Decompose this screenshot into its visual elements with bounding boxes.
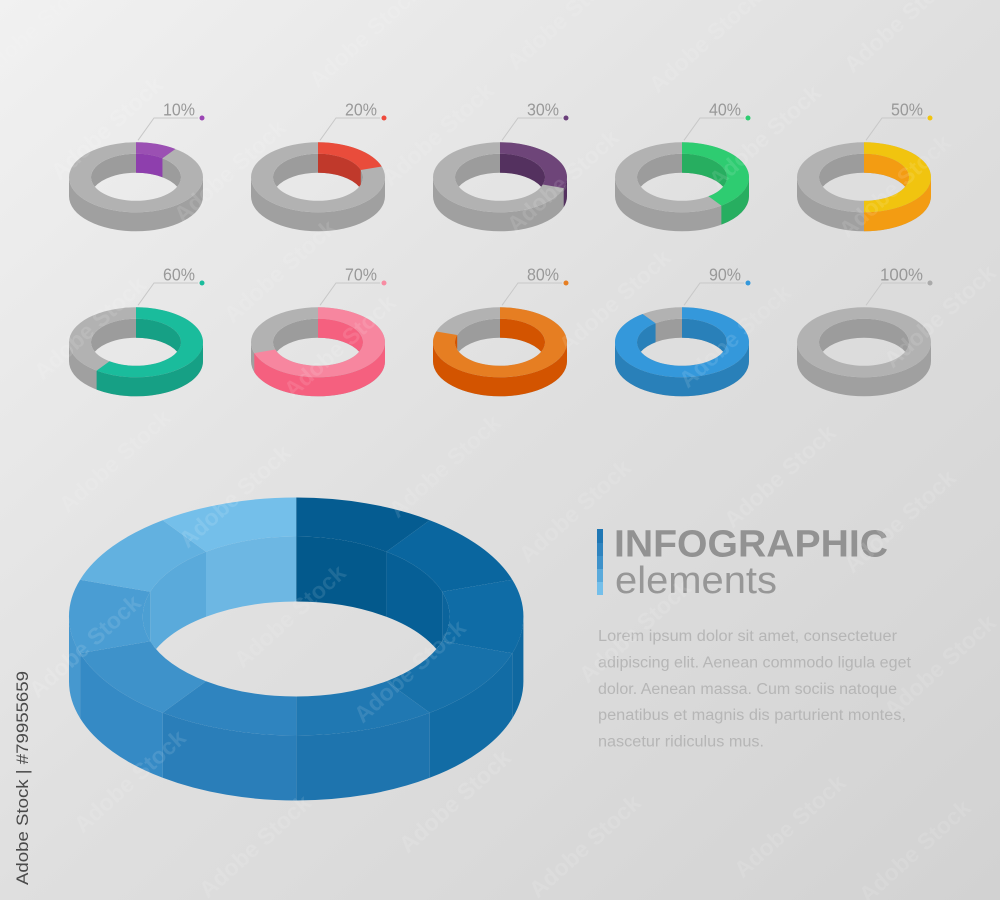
watermark pattern: Adobe Stock [554,244,676,358]
watermark pattern: Adobe Stock [384,409,506,523]
donut chart: 50% [797,99,932,231]
watermark pattern: Adobe Stock [674,279,796,393]
watermark pattern: Adobe Stock [219,214,341,328]
donut chart: 20%: 20% [345,99,377,119]
watermark pattern: Adobe Stock [69,724,191,838]
watermark pattern: Adobe Stock [54,404,176,518]
watermark pattern: Adobe Stock [879,259,1000,373]
donut chart: 60%: 60% [163,264,195,284]
watermark pattern: Adobe Stock [169,114,291,228]
donut chart: 90%: 90% [709,264,741,284]
stock credit: Adobe Stock | #79955659 [13,671,32,885]
watermark pattern: Adobe Stock [834,129,956,243]
watermark pattern: Adobe Stock [349,614,471,728]
watermark pattern: Adobe Stock [514,454,636,568]
body text: penatibus et magnis dis parturient montes, [598,707,906,724]
watermark pattern: Adobe Stock [704,79,826,193]
donut chart: 30% [433,99,568,231]
watermark pattern: Adobe Stock [574,574,696,688]
donut chart: 60% [69,264,204,396]
heading: INFOGRAPHIC: INFOGRAPHIC [614,524,888,566]
donut chart: 40%: 40% [709,99,741,119]
body text: nascetur ridiculus mus. [598,734,764,751]
watermark pattern: Adobe Stock [229,559,351,673]
watermark pattern: Adobe Stock [174,439,296,553]
body text [598,628,912,751]
donut chart: 80%: 80% [527,264,559,284]
large 3D donut chart [69,498,523,800]
watermark pattern: Adobe Stock [839,464,961,578]
watermark pattern: Adobe Stock [879,609,1000,723]
donut chart: 10% [69,99,204,231]
donut chart: 20% [251,99,386,231]
donut chart: 40% [615,99,750,231]
watermark pattern: Adobe Stock [46,71,168,185]
donut chart: 70%: 70% [345,264,377,284]
watermark pattern: Adobe Stock [719,419,841,533]
donut chart: 90% [615,264,750,396]
donut chart: 70% [251,264,386,396]
watermark pattern: Adobe Stock [24,589,146,703]
body text: dolor. Aenean massa. Cum sociis natoque [598,681,897,698]
watermark pattern: Adobe Stock [524,789,646,900]
watermark pattern: Adobe Stock [729,769,851,883]
watermark pattern: Adobe Stock [394,744,516,858]
donut chart: 30%: 30% [527,99,559,119]
body text: Lorem ipsum dolor sit amet, consectetuer [598,628,897,645]
donut chart: 100% [797,264,932,396]
donut chart: 10%: 10% [163,99,195,119]
watermark pattern: Adobe Stock [279,289,401,403]
heading: elements: elements [615,560,777,602]
donut chart: 100%: 100% [880,264,923,284]
heading accent bar [597,529,603,595]
watermark pattern: Adobe Stock [29,271,151,385]
watermark pattern: Adobe Stock [377,77,499,191]
watermark pattern: Adobe Stock [502,124,624,238]
watermark pattern: Adobe Stock [194,789,316,900]
donut chart: 80% [433,264,568,396]
donut chart: 50%: 50% [891,99,923,119]
body text: adipiscing elit. Aenean commodo ligula eget [598,654,912,671]
